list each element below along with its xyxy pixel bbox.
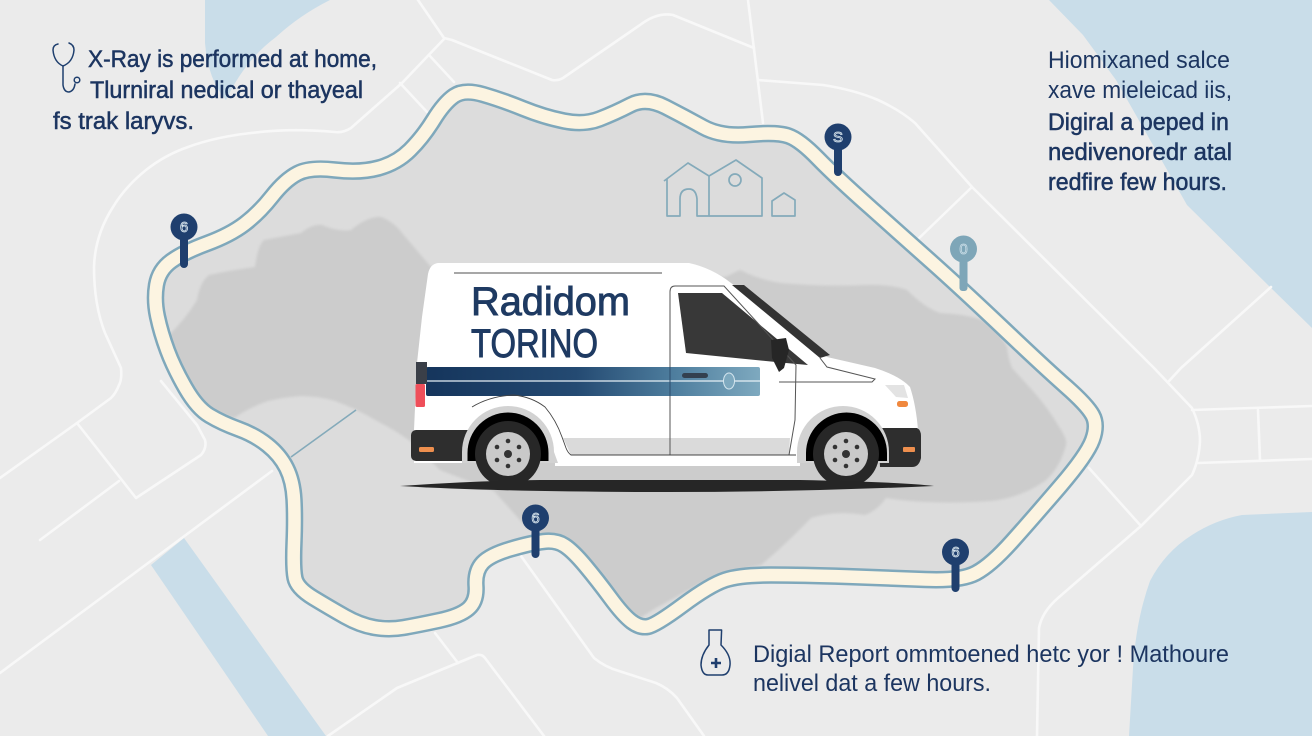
pin: south stop <box>522 504 549 558</box>
van lettering: Radidom <box>471 280 630 324</box>
text: X-ray lines: Tlurniral nedical or thayeal <box>90 77 363 104</box>
darker coverage blob behind van <box>167 217 1066 618</box>
door outline <box>670 286 796 455</box>
icon: houses <box>664 160 795 216</box>
icon: flask with cross <box>701 630 730 675</box>
callout: top right text: Digiral a peped in <box>1048 109 1229 136</box>
rear tail light <box>416 362 427 407</box>
route road <box>155 92 1095 629</box>
lower door panel <box>563 438 790 455</box>
pin: north stop: S <box>833 129 843 146</box>
roof line <box>454 272 662 274</box>
van body <box>414 263 918 463</box>
stripe badge <box>724 373 734 389</box>
side window <box>678 293 808 365</box>
pin: south stop: 6 <box>531 510 540 527</box>
text: report lines <box>753 641 1229 697</box>
text: report lines: Digial Report ommtoened hetc yor ! Mathoure <box>753 641 1229 668</box>
callout: X-ray at home <box>53 43 377 135</box>
front wheel <box>797 406 889 487</box>
text: report lines: nelivel dat a few hours. <box>753 670 991 697</box>
van lettering: TORINO <box>471 322 598 366</box>
headlight <box>885 385 908 407</box>
body stripe <box>426 367 760 396</box>
van <box>400 263 934 492</box>
hood line <box>779 358 875 382</box>
callout: top right text: redfire few hours. <box>1048 169 1227 196</box>
text: X-ray lines <box>53 46 377 135</box>
text: X-ray lines: fs trak laryvs. <box>53 108 194 135</box>
door handle <box>682 373 708 378</box>
pin: east stop <box>950 236 977 291</box>
callout: top right text: nedivenoredr atal <box>1048 139 1232 166</box>
rear bumper <box>411 430 473 461</box>
pin: west stop: 6 <box>180 219 188 236</box>
callout: top right text: Hiomixaned salce <box>1048 47 1230 74</box>
pin: south-east stop: 6 <box>951 544 960 561</box>
pin: west stop <box>170 214 198 268</box>
callout: top right text: xave mieleicad iis, <box>1048 77 1232 104</box>
callout: top right text <box>1048 47 1232 196</box>
rear wheel <box>462 406 558 487</box>
van ground shadow <box>400 480 934 492</box>
windshield <box>732 285 830 358</box>
pin: north stop <box>824 124 852 176</box>
icon: stethoscope <box>53 43 80 92</box>
side road <box>291 410 356 457</box>
side sill <box>555 455 800 466</box>
front bumper <box>878 428 921 467</box>
wheel arch line <box>472 395 796 455</box>
side mirror <box>771 338 789 372</box>
pin: east stop: 0 <box>959 241 968 258</box>
pin: south-east stop <box>942 538 969 592</box>
service area inside route <box>155 92 1095 629</box>
van lettering <box>471 280 630 366</box>
callout: digital report <box>701 630 1229 697</box>
text: X-ray lines: X-Ray is performed at home, <box>88 46 377 73</box>
